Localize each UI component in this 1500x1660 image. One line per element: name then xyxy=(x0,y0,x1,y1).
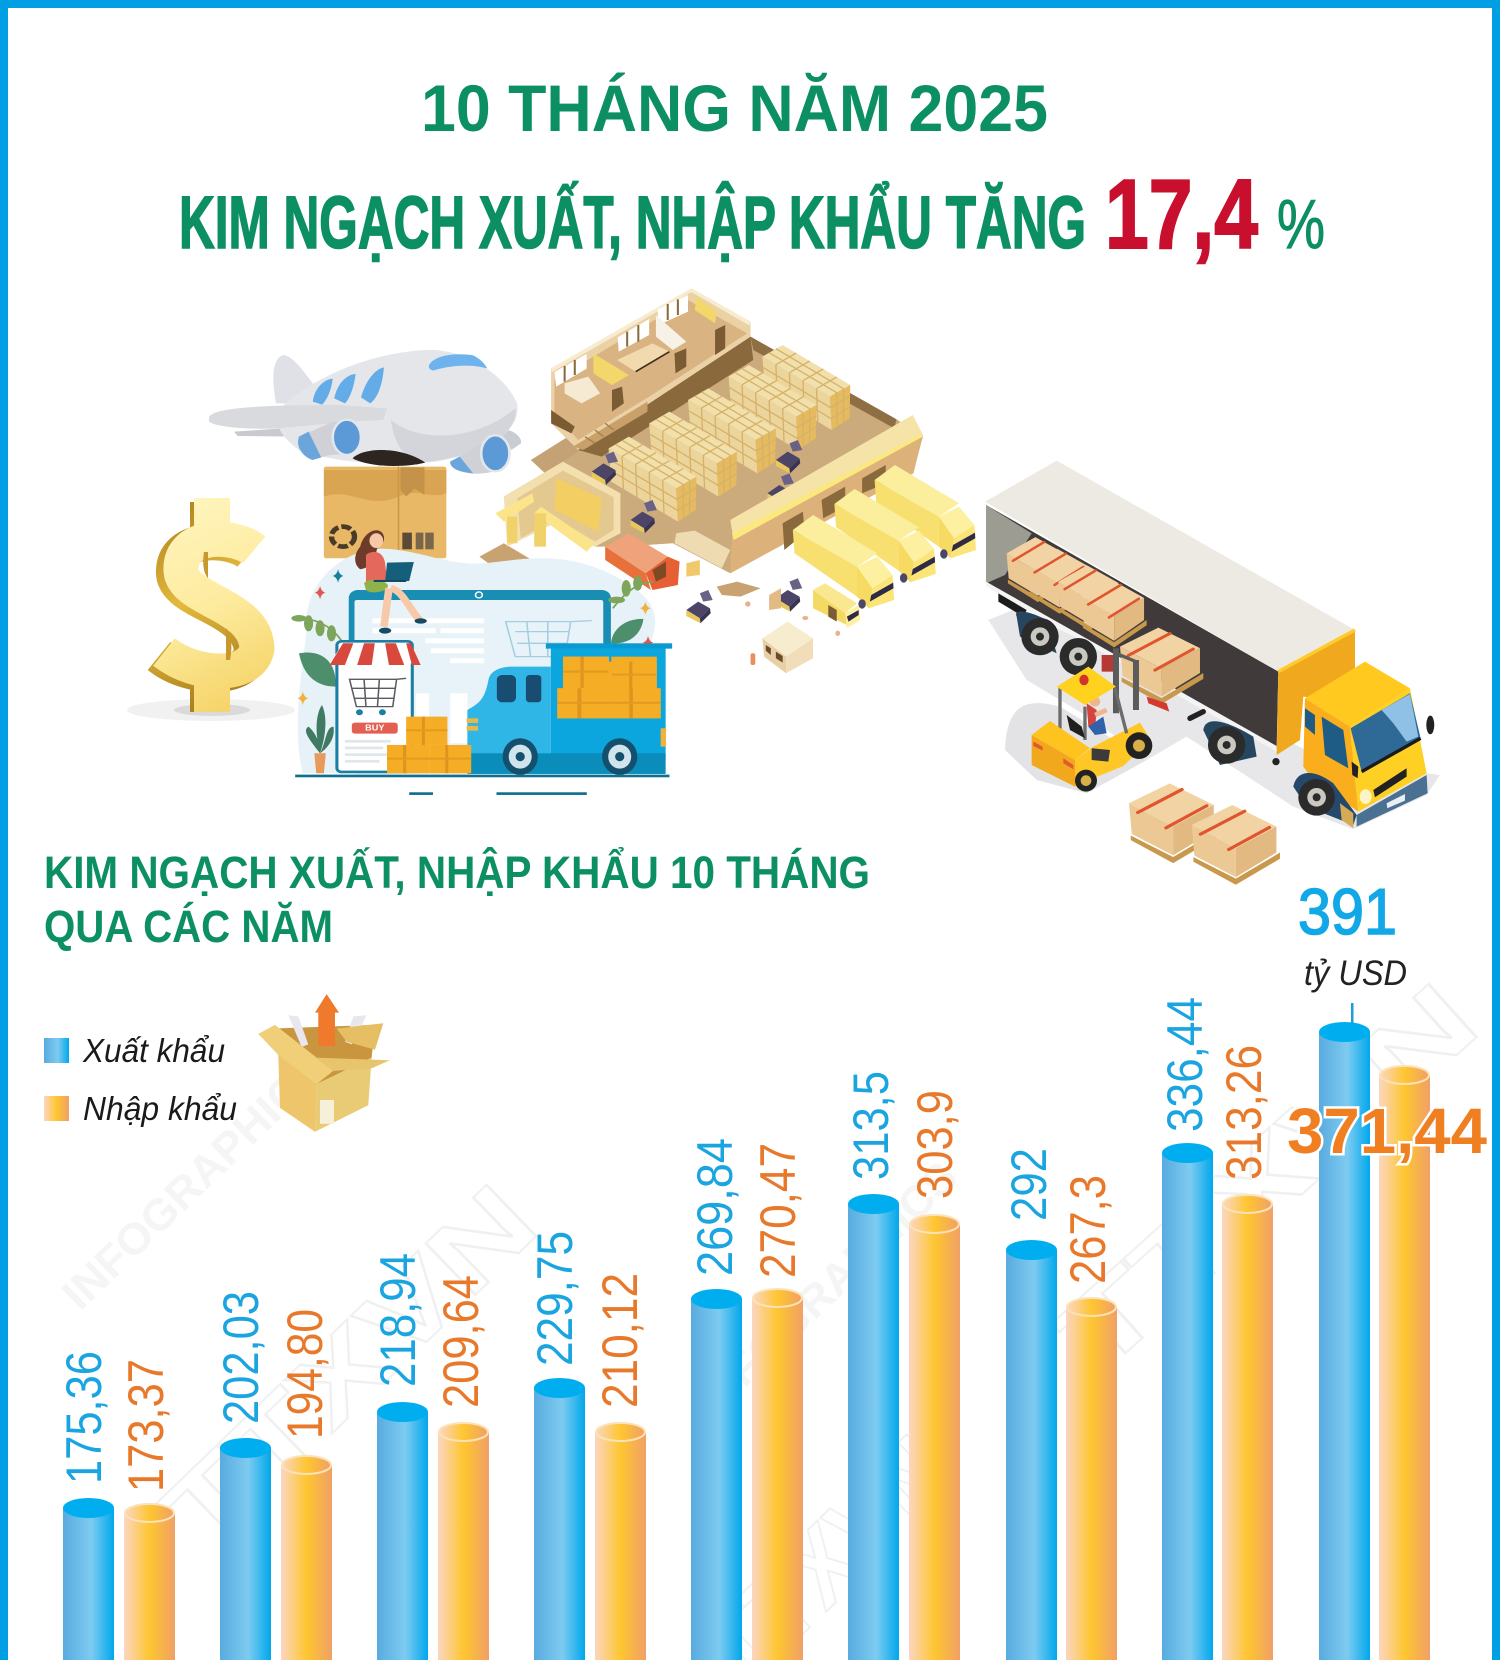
yellow delivery trucks xyxy=(793,465,976,609)
chart heading: QUA CÁC NĂM xyxy=(44,901,333,952)
shop phone: BUY xyxy=(365,723,385,732)
guard house xyxy=(751,622,813,673)
dollar counters xyxy=(203,552,231,660)
import value labels: 313,26 xyxy=(1216,1045,1272,1180)
illustration: e-commerce scene xyxy=(291,530,672,795)
title: line 2 xyxy=(179,159,1325,269)
bar chart xyxy=(56,997,1430,1660)
bars: pair 5 xyxy=(691,1289,803,1660)
export value labels: 269,84 xyxy=(687,1138,743,1276)
illustration: dollar sign xyxy=(127,498,295,721)
export value labels: 292 xyxy=(1001,1148,1057,1221)
orange container xyxy=(605,533,680,590)
watermarks: TTXVN xyxy=(140,1163,559,1573)
import value labels: 270,47 xyxy=(750,1143,806,1278)
import value labels: 209,64 xyxy=(433,1275,489,1408)
illustration: big truck and forklift xyxy=(985,461,1440,885)
bars: pair 3 xyxy=(377,1402,489,1660)
import value labels xyxy=(118,1045,1272,1492)
blue delivery truck xyxy=(467,643,672,775)
pallets in trailer xyxy=(1007,537,1203,712)
storage racks xyxy=(609,345,850,522)
legend xyxy=(44,1032,237,1127)
shop phone xyxy=(330,641,421,772)
chart heading xyxy=(44,847,870,952)
potted plant xyxy=(306,705,334,773)
illustration: airplane xyxy=(209,350,521,474)
bars: pair 6 xyxy=(848,1194,960,1660)
dollar face layer xyxy=(164,498,257,712)
icon: open box with arrow xyxy=(258,994,390,1132)
import value labels: 173,37 xyxy=(118,1359,174,1492)
office block xyxy=(551,288,751,450)
watermarks xyxy=(53,961,1500,1660)
watermarks: INFOGRAPHICS xyxy=(53,1044,335,1319)
trailer xyxy=(985,461,1355,765)
import value labels: 210,12 xyxy=(592,1273,648,1408)
truck cab xyxy=(1293,662,1434,828)
legend: Xuất khẩu xyxy=(82,1032,225,1069)
ground line xyxy=(295,775,669,795)
callout: 2025 export total: tỷ USD xyxy=(1304,954,1407,993)
forklift xyxy=(1032,648,1152,792)
dollar depth layer xyxy=(159,502,252,712)
bars: pair 4 xyxy=(534,1378,646,1660)
export value labels: 336,44 xyxy=(1157,997,1213,1132)
title: line 1: 10 THÁNG NĂM 2025 xyxy=(421,71,1048,145)
illustration: warehouse xyxy=(479,288,976,673)
export value labels: 229,75 xyxy=(527,1231,583,1366)
callout: 2025 export total: 391 xyxy=(1298,875,1397,948)
legend: Nhập khẩu xyxy=(83,1090,237,1127)
front room xyxy=(495,462,620,552)
illustration: cargo box xyxy=(324,467,446,558)
front boxes xyxy=(387,717,471,773)
import value labels: 194,80 xyxy=(277,1309,333,1439)
watermarks: TTXVN xyxy=(1036,961,1500,1395)
import value labels: 303,9 xyxy=(907,1090,963,1199)
bars: pair 8 xyxy=(1162,1143,1273,1660)
chart heading: KIM NGẠCH XUẤT, NHẬP KHẨU 10 THÁNG xyxy=(44,847,870,898)
outer dock wall xyxy=(674,415,923,573)
leaves and sparkles xyxy=(291,569,653,705)
laptop xyxy=(349,590,611,773)
callout: 2025 import total: 371,44 xyxy=(1287,1095,1487,1167)
title: line 2: 17,4 xyxy=(1105,159,1258,269)
title: line 2: KIM NGẠCH XUẤT, NHẬP KHẨU TĂNG xyxy=(179,181,1086,264)
bars: pair 2 xyxy=(220,1438,332,1660)
bars: pair 7 xyxy=(1006,1240,1117,1660)
pallets on ground xyxy=(1129,783,1280,885)
export value labels: 175,36 xyxy=(56,1351,112,1484)
bars: pair 1 xyxy=(63,1498,175,1660)
export value labels: 202,03 xyxy=(213,1291,269,1424)
export value labels: 218,94 xyxy=(370,1253,426,1387)
bars: pair 9 xyxy=(1319,1022,1430,1660)
import value labels: 267,3 xyxy=(1060,1175,1116,1284)
export value labels: 313,5 xyxy=(843,1071,899,1180)
watermarks: INFOGRAPHICS xyxy=(685,1152,967,1427)
callout: 2025 export total xyxy=(1298,875,1407,1025)
woman with laptop xyxy=(355,530,427,634)
loading yard items xyxy=(686,560,860,636)
export value labels xyxy=(56,997,1213,1484)
title: line 2: % xyxy=(1277,185,1325,263)
